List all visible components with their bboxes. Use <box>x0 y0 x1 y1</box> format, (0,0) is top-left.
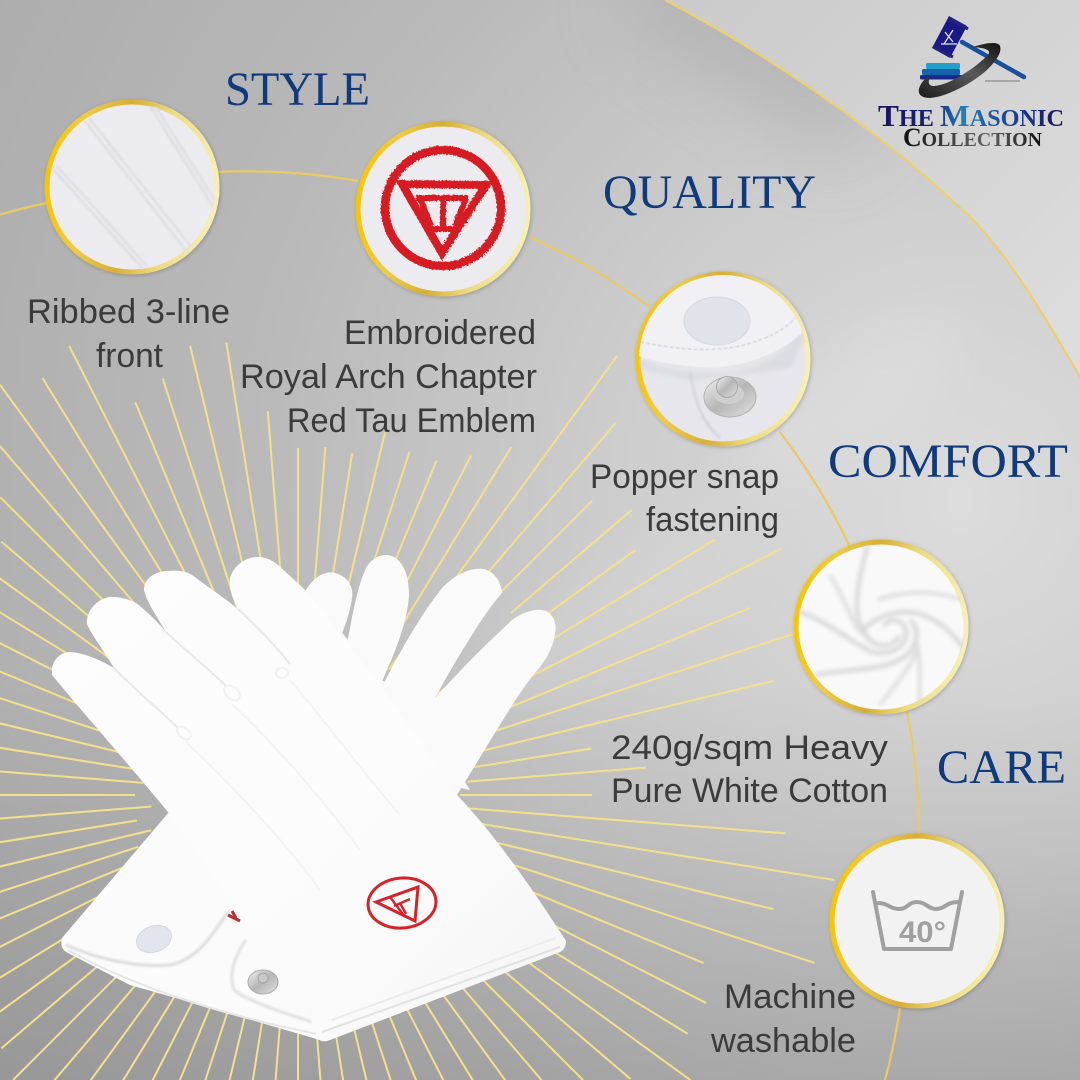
flap shadow <box>639 332 804 378</box>
headings <box>225 63 1068 794</box>
heading: care: CARE <box>937 741 1066 794</box>
logo: The Masonic Collection <box>878 16 1064 152</box>
icon: gavel <box>919 16 1024 98</box>
outer gold arc <box>665 0 1080 377</box>
caption: machine washable <box>710 978 856 1060</box>
caption: cotton: 240g/sqm Heavy <box>611 729 889 767</box>
circle: wash care <box>832 836 1002 1006</box>
gloves photo <box>52 555 566 1041</box>
icon: 40 degree wash tub: 40° <box>899 916 946 949</box>
logo wordmark: THE MASONIC <box>878 98 1064 133</box>
heading: quality: QUALITY <box>603 166 816 219</box>
caption: popper snap <box>590 458 779 539</box>
caption: cotton: Pure White Cotton <box>611 772 888 810</box>
caption: emblem: Royal Arch Chapter <box>240 358 537 396</box>
icon: 40 degree wash tub <box>873 892 962 949</box>
caption: machine washable: Machine <box>724 978 856 1016</box>
flap seam <box>66 912 228 966</box>
circle: embroidered emblem <box>358 124 528 294</box>
caption: emblem: Red Tau Emblem <box>287 402 536 440</box>
caption: emblem: Embroidered <box>344 314 536 352</box>
snap cap <box>133 921 175 957</box>
glove emblem <box>366 875 438 931</box>
caption: ribbed front: front <box>96 337 163 375</box>
circle: ribbed fabric <box>47 102 218 272</box>
caption: ribbed front <box>27 293 230 375</box>
heading: comfort: COMFORT <box>828 435 1068 488</box>
circle: popper snap <box>630 270 815 444</box>
sunburst rays <box>0 343 834 1080</box>
caption: machine washable: washable <box>710 1022 856 1060</box>
caption: ribbed front: Ribbed 3-line <box>27 293 230 331</box>
far glove fingers <box>305 555 556 795</box>
hidden emblem fragment <box>228 911 240 921</box>
front glove <box>52 557 566 1041</box>
stud <box>704 377 756 417</box>
finger seams and ribs <box>114 609 560 1032</box>
caption: emblem <box>240 314 537 440</box>
gold connector arc <box>0 171 919 1080</box>
circle: cotton swirl <box>795 542 966 712</box>
caption: cotton <box>611 729 889 810</box>
logo sub-wordmark: COLLECTION <box>903 123 1043 152</box>
silver stud <box>248 970 278 994</box>
flap <box>639 275 802 368</box>
caption: popper snap: Popper snap <box>590 458 779 496</box>
far glove cuff with flap <box>61 800 360 1040</box>
caption: popper snap: fastening <box>646 501 779 539</box>
snap cap <box>684 297 750 345</box>
heading: style: STYLE <box>225 63 370 116</box>
